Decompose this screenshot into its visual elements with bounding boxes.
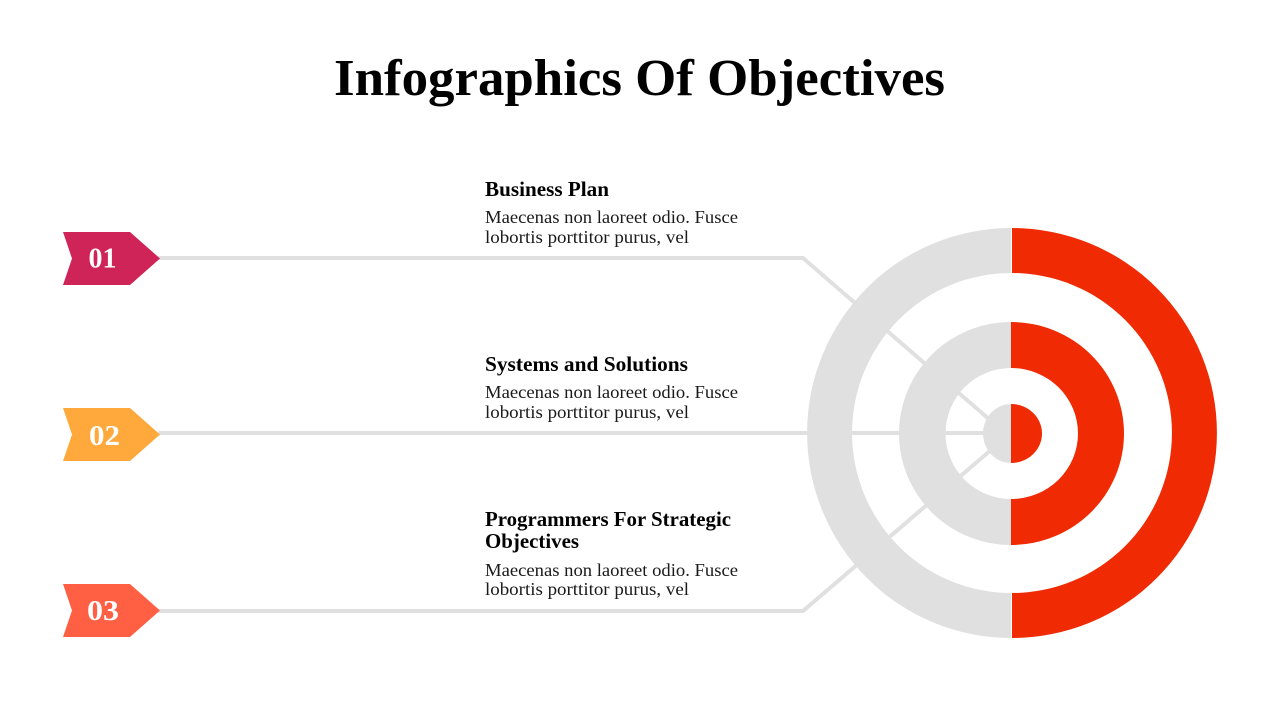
badge 02: 02 <box>89 420 120 452</box>
badge 03 <box>63 584 160 637</box>
text block: business plan: Business Plan <box>485 177 609 201</box>
text block: programmers for strategic objectives <box>485 507 738 599</box>
text block: programmers for strategic objectives: lobortis porttitor purus, vel <box>485 579 689 599</box>
outer ring red half <box>1012 228 1217 638</box>
title: Infographics Of Objectives <box>334 50 945 107</box>
centre circle red half <box>1011 404 1042 463</box>
text block: programmers for strategic objectives: Maecenas non laoreet odio. Fusce <box>485 560 738 580</box>
text block: systems and solutions: Maecenas non laoreet odio. Fusce <box>485 382 738 402</box>
middle ring red half <box>1011 322 1124 545</box>
badge 02 <box>63 408 160 461</box>
text block: business plan: lobortis porttitor purus, vel <box>485 227 689 247</box>
connector lines <box>158 258 1005 611</box>
text block: programmers for strategic objectives: Objectives <box>485 529 579 553</box>
text block: business plan <box>485 177 738 247</box>
badge 01: 01 <box>88 242 116 274</box>
text block: systems and solutions <box>485 352 738 422</box>
text block: systems and solutions: Systems and Solutions <box>485 352 688 376</box>
middle ring grey half <box>899 322 1011 545</box>
text block: systems and solutions: lobortis porttitor purus, vel <box>485 402 689 422</box>
text block: programmers for strategic objectives: Programmers For Strategic <box>485 507 731 531</box>
text block: business plan: Maecenas non laoreet odio. Fusce <box>485 207 738 227</box>
target diagram <box>807 228 1217 638</box>
outer ring grey half <box>807 228 1011 638</box>
badge 01 <box>63 232 160 285</box>
badge 03: 03 <box>87 595 119 627</box>
centre circle grey half <box>983 404 1011 463</box>
